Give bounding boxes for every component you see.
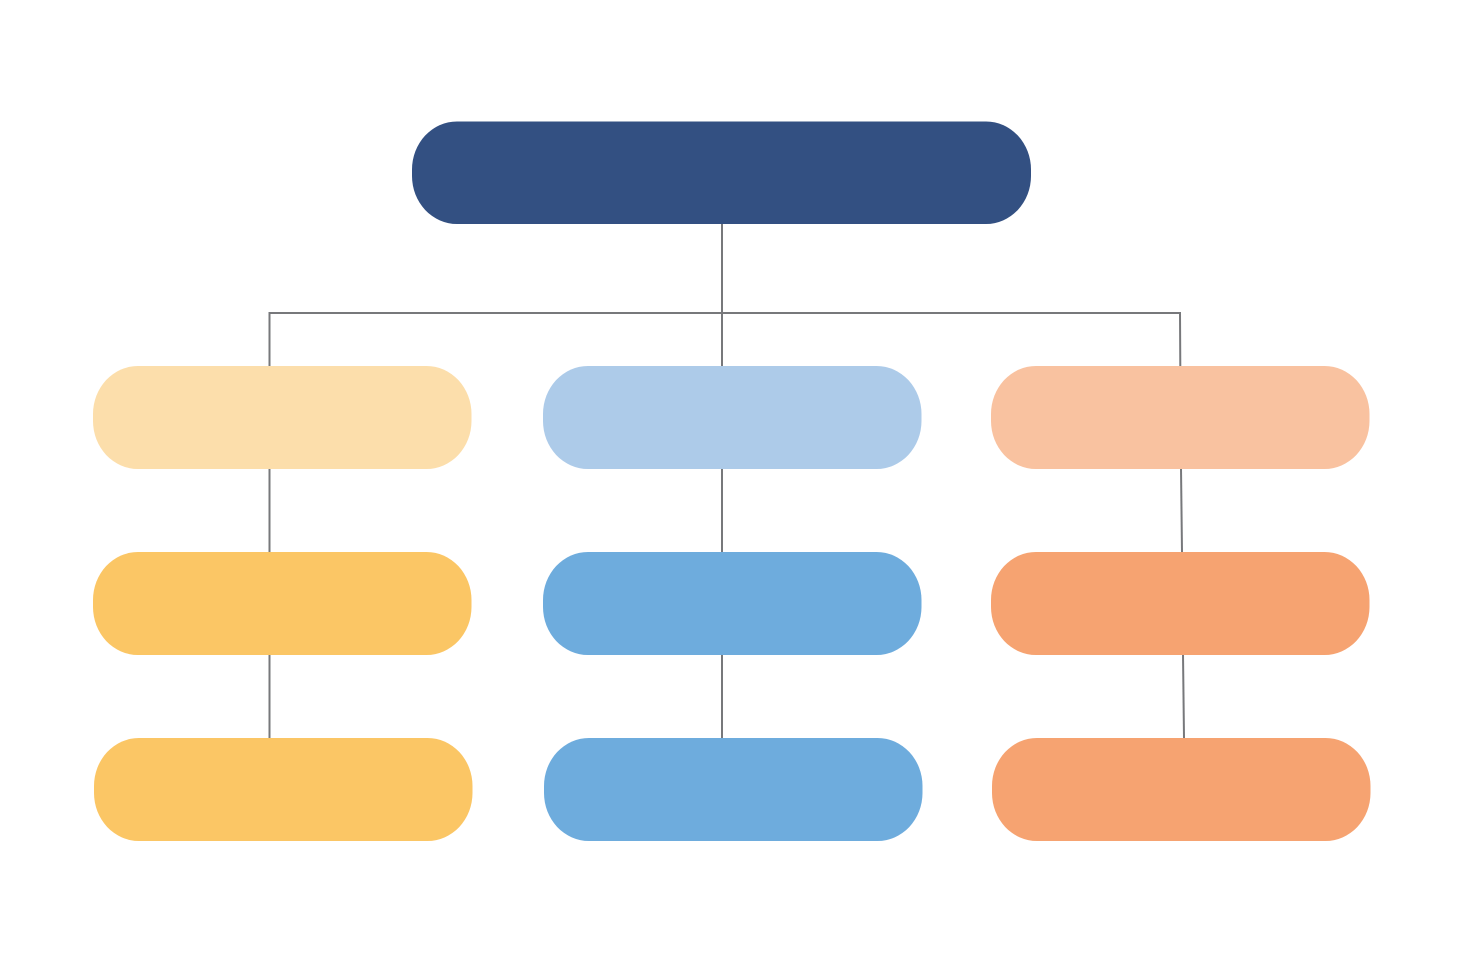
top box: root node (412, 122, 1031, 224)
column 2 level 3 box (544, 738, 922, 841)
column 1 level 2 box (93, 552, 472, 655)
connector lines (270, 223, 1184, 738)
column 2 level 1 box (543, 366, 922, 469)
column 3 level 3 box (992, 738, 1370, 841)
column 2 level 2 box (543, 552, 922, 655)
column 3 level 1 box (991, 366, 1370, 469)
column 1 level 1 box (93, 366, 472, 469)
column 1 level 3 box (94, 738, 472, 841)
column 3 level 2 box (991, 552, 1370, 655)
